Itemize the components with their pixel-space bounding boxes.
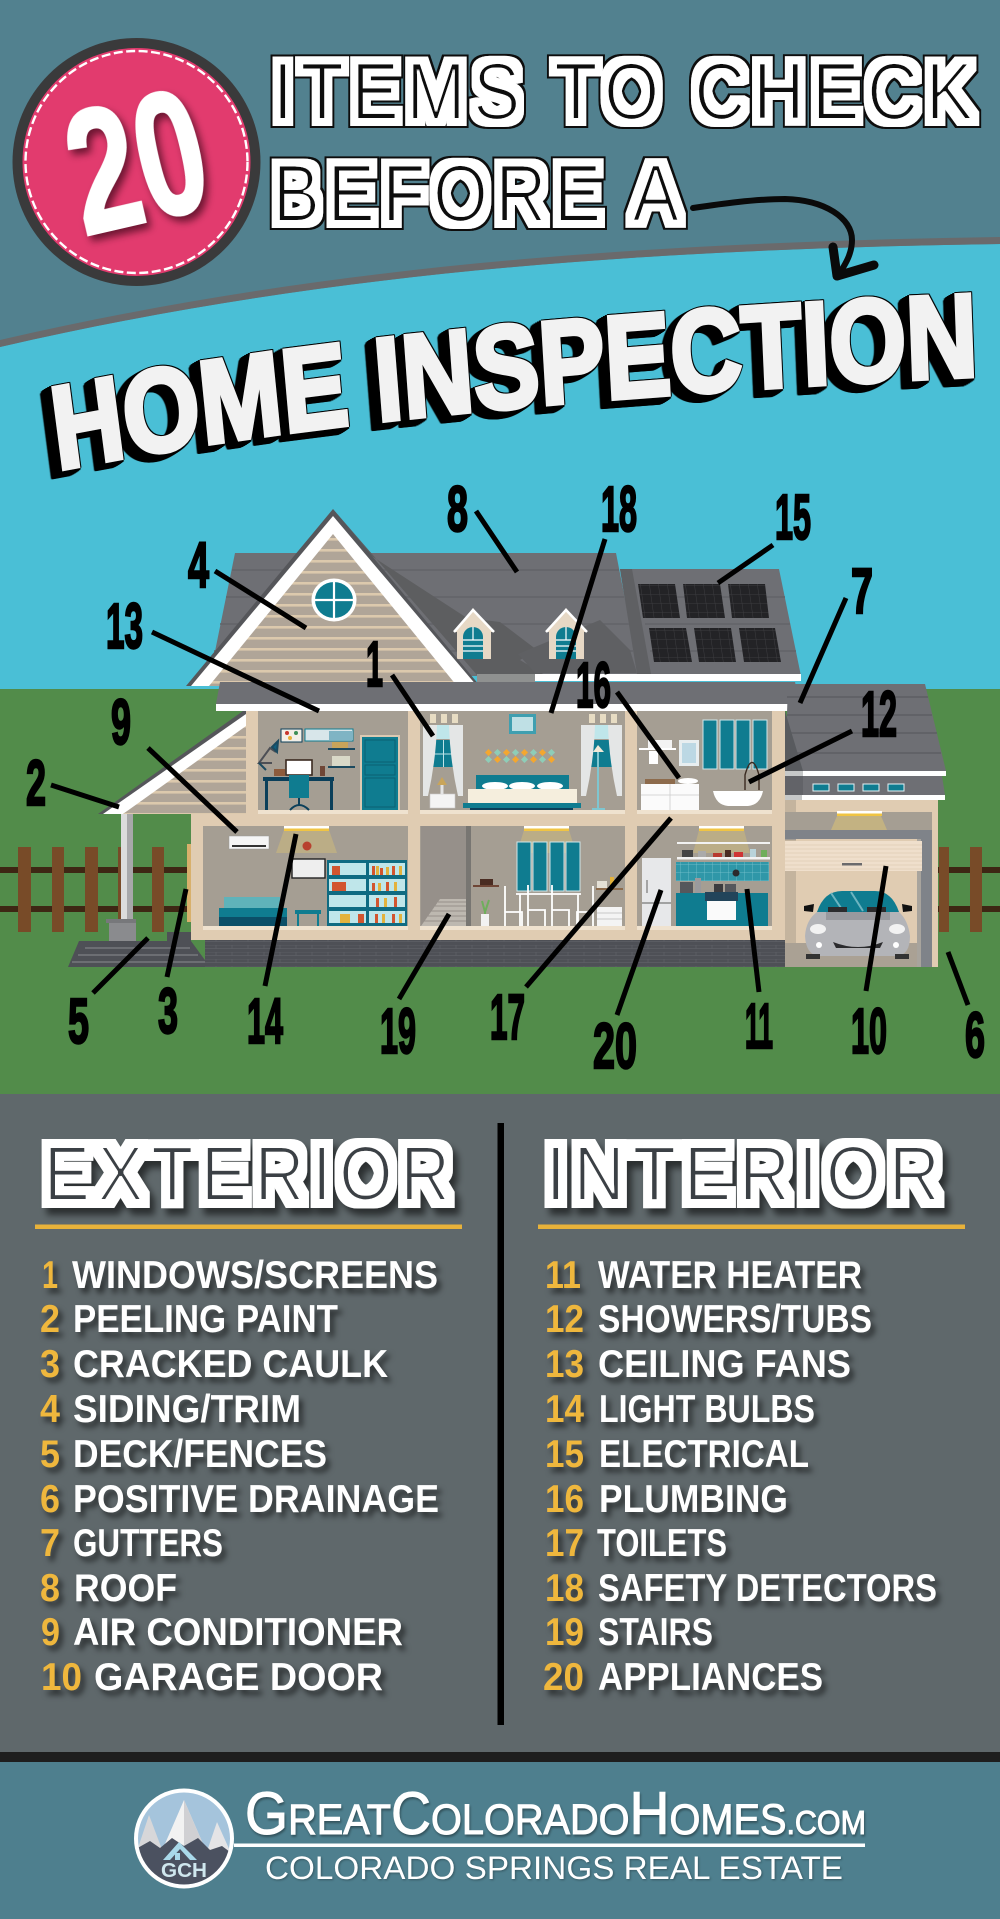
panel: interior list (538, 1131, 965, 1699)
room: bathroom (637, 711, 772, 814)
interior items: 13 (545, 1343, 584, 1386)
grass background (0, 689, 1000, 1095)
callout 15 (718, 481, 811, 583)
callout 14: 14 (247, 985, 283, 1057)
callout 1 (366, 628, 433, 736)
callout 13 (106, 590, 319, 711)
callout 17: 17 (490, 981, 525, 1053)
deck steps (68, 932, 210, 967)
gable front (186, 509, 480, 686)
callout 18: 18 (601, 473, 637, 545)
callout 18 (551, 473, 637, 713)
callout 20: 20 (593, 1010, 637, 1082)
room: dining and stairs (420, 826, 625, 930)
interior items (543, 1254, 937, 1699)
garage upper band (785, 776, 945, 800)
logo wordmark: GREATCOLORADOHOMES.COM (245, 1780, 866, 1847)
callout 8: 8 (447, 473, 468, 545)
house frame (191, 711, 785, 940)
callout 11 (745, 889, 773, 1062)
callout 6 (948, 952, 985, 1071)
eave: grey band with white fascia (216, 682, 800, 711)
interior items: TOILETS (597, 1522, 727, 1565)
exterior items: POSITIVE DRAINAGE (73, 1478, 439, 1521)
interior items: ELECTRICAL (599, 1433, 809, 1476)
callout 4: 4 (188, 529, 209, 601)
callout 1: 1 (366, 628, 383, 700)
interior items: CEILING FANS (598, 1343, 851, 1386)
exterior items: DECK/FENCES (73, 1433, 327, 1476)
porch column (106, 814, 136, 941)
headline: home inspection: HOME INSPECTION (39, 291, 976, 480)
callout 3 (158, 889, 186, 1047)
gold rule (538, 1224, 965, 1229)
badge: 20: 20 (48, 51, 225, 273)
callout numbers and leader lines: 11 (745, 990, 773, 1062)
fence: left (0, 847, 187, 932)
callout 4 (188, 529, 306, 628)
exterior items: CRACKED CAULK (73, 1343, 388, 1386)
interior items: 20 (543, 1656, 584, 1699)
callout 19: 19 (380, 995, 416, 1067)
front door edge (187, 844, 192, 922)
exterior items: 6 (40, 1478, 60, 1521)
porch roof (98, 711, 246, 814)
roof eave: white trim (477, 674, 801, 682)
callout 10: 10 (851, 995, 887, 1067)
interior items: 15 (545, 1433, 584, 1476)
callout 2: 2 (26, 747, 46, 819)
interior items: WATER HEATER (598, 1254, 862, 1297)
callout 7 (800, 555, 873, 703)
exterior items: 4 (40, 1388, 60, 1431)
logo: mountain badge: GCH (161, 1860, 207, 1882)
exterior items: 9 (41, 1611, 60, 1654)
callout 19 (380, 914, 449, 1067)
callout 5 (68, 938, 148, 1057)
room: kitchen (637, 826, 772, 930)
footer background (0, 1762, 1000, 1919)
interior items: 16 (545, 1478, 584, 1521)
callout 12 (749, 678, 897, 782)
gold rule (35, 1224, 462, 1229)
roof: solar annex (620, 569, 801, 676)
callout 17 (490, 818, 671, 1053)
callout 9: 9 (111, 686, 131, 758)
callout 5: 5 (68, 985, 89, 1057)
column divider (498, 1123, 504, 1725)
callout 3: 3 (158, 975, 178, 1047)
panel: exterior list (35, 1131, 462, 1699)
interior items: 14 (545, 1388, 584, 1431)
exterior items: 2 (40, 1298, 60, 1341)
car (804, 891, 912, 959)
callout 12: 12 (861, 678, 897, 750)
heading: interior: INTERIOR (546, 1131, 948, 1217)
garage structure (785, 800, 938, 967)
heading: exterior: EXTERIOR (44, 1131, 458, 1217)
exterior items: 7 (40, 1522, 60, 1565)
interior items: APPLIANCES (598, 1656, 823, 1699)
callout 16 (576, 649, 679, 778)
sky background (0, 244, 1000, 689)
callout 14 (247, 834, 296, 1057)
fence: right (938, 847, 1000, 932)
callout numbers and leader lines (26, 473, 985, 1082)
interior items: SAFETY DETECTORS (598, 1567, 937, 1610)
exterior items (40, 1254, 439, 1699)
callout 20 (593, 890, 661, 1082)
room: bedroom (420, 711, 625, 814)
exterior items: SIDING/TRIM (73, 1388, 301, 1431)
foundation (205, 940, 787, 967)
exterior items: GARAGE DOOR (94, 1656, 383, 1699)
dormer windows (454, 608, 587, 659)
callout 2 (26, 747, 119, 819)
callout 9 (111, 686, 237, 832)
header background (0, 0, 1000, 350)
callout 8 (447, 473, 517, 572)
callout 16: 16 (576, 649, 611, 721)
room: office upper left (258, 711, 408, 814)
callout 13: 13 (106, 590, 143, 662)
exterior items: GUTTERS (73, 1522, 223, 1565)
logo: mountain badge (134, 1788, 234, 1890)
house illustration (0, 509, 1000, 967)
interior items: 12 (545, 1298, 584, 1341)
exterior items: WINDOWS/SCREENS (72, 1254, 438, 1297)
panel: checklist background (0, 1094, 1000, 1752)
interior items: 17 (545, 1522, 584, 1565)
callout 7: 7 (851, 555, 873, 627)
curved grey band (0, 237, 1000, 347)
exterior items: 3 (40, 1343, 60, 1386)
callout 15: 15 (775, 481, 811, 553)
exterior items: 1 (42, 1254, 58, 1297)
interior items: 11 (545, 1254, 581, 1297)
logo rule (234, 1844, 865, 1847)
exterior items: ROOF (74, 1567, 177, 1610)
interior items: LIGHT BULBS (599, 1388, 815, 1431)
footer divider bar (0, 1752, 1000, 1762)
garage roof (785, 684, 946, 776)
interior items: 18 (545, 1567, 584, 1610)
callout 10 (851, 866, 887, 1067)
exterior items: 5 (40, 1433, 60, 1476)
exterior items: 10 (41, 1656, 82, 1699)
exterior items: PEELING PAINT (73, 1298, 338, 1341)
roof: main (210, 509, 640, 676)
interior items: PLUMBING (599, 1478, 788, 1521)
room: living room (203, 826, 408, 930)
exterior items: AIR CONDITIONER (73, 1611, 403, 1654)
solar panels (638, 584, 781, 662)
interior items: STAIRS (598, 1611, 713, 1654)
interior items: 19 (545, 1611, 584, 1654)
callout 6: 6 (965, 999, 985, 1071)
arrow: curved to home inspection (693, 199, 874, 276)
interior items: SHOWERS/TUBS (598, 1298, 872, 1341)
exterior items: 8 (40, 1567, 60, 1610)
logo tagline: COLORADO SPRINGS REAL ESTATE (265, 1850, 843, 1886)
title line 2: BEFORE A (273, 149, 687, 239)
